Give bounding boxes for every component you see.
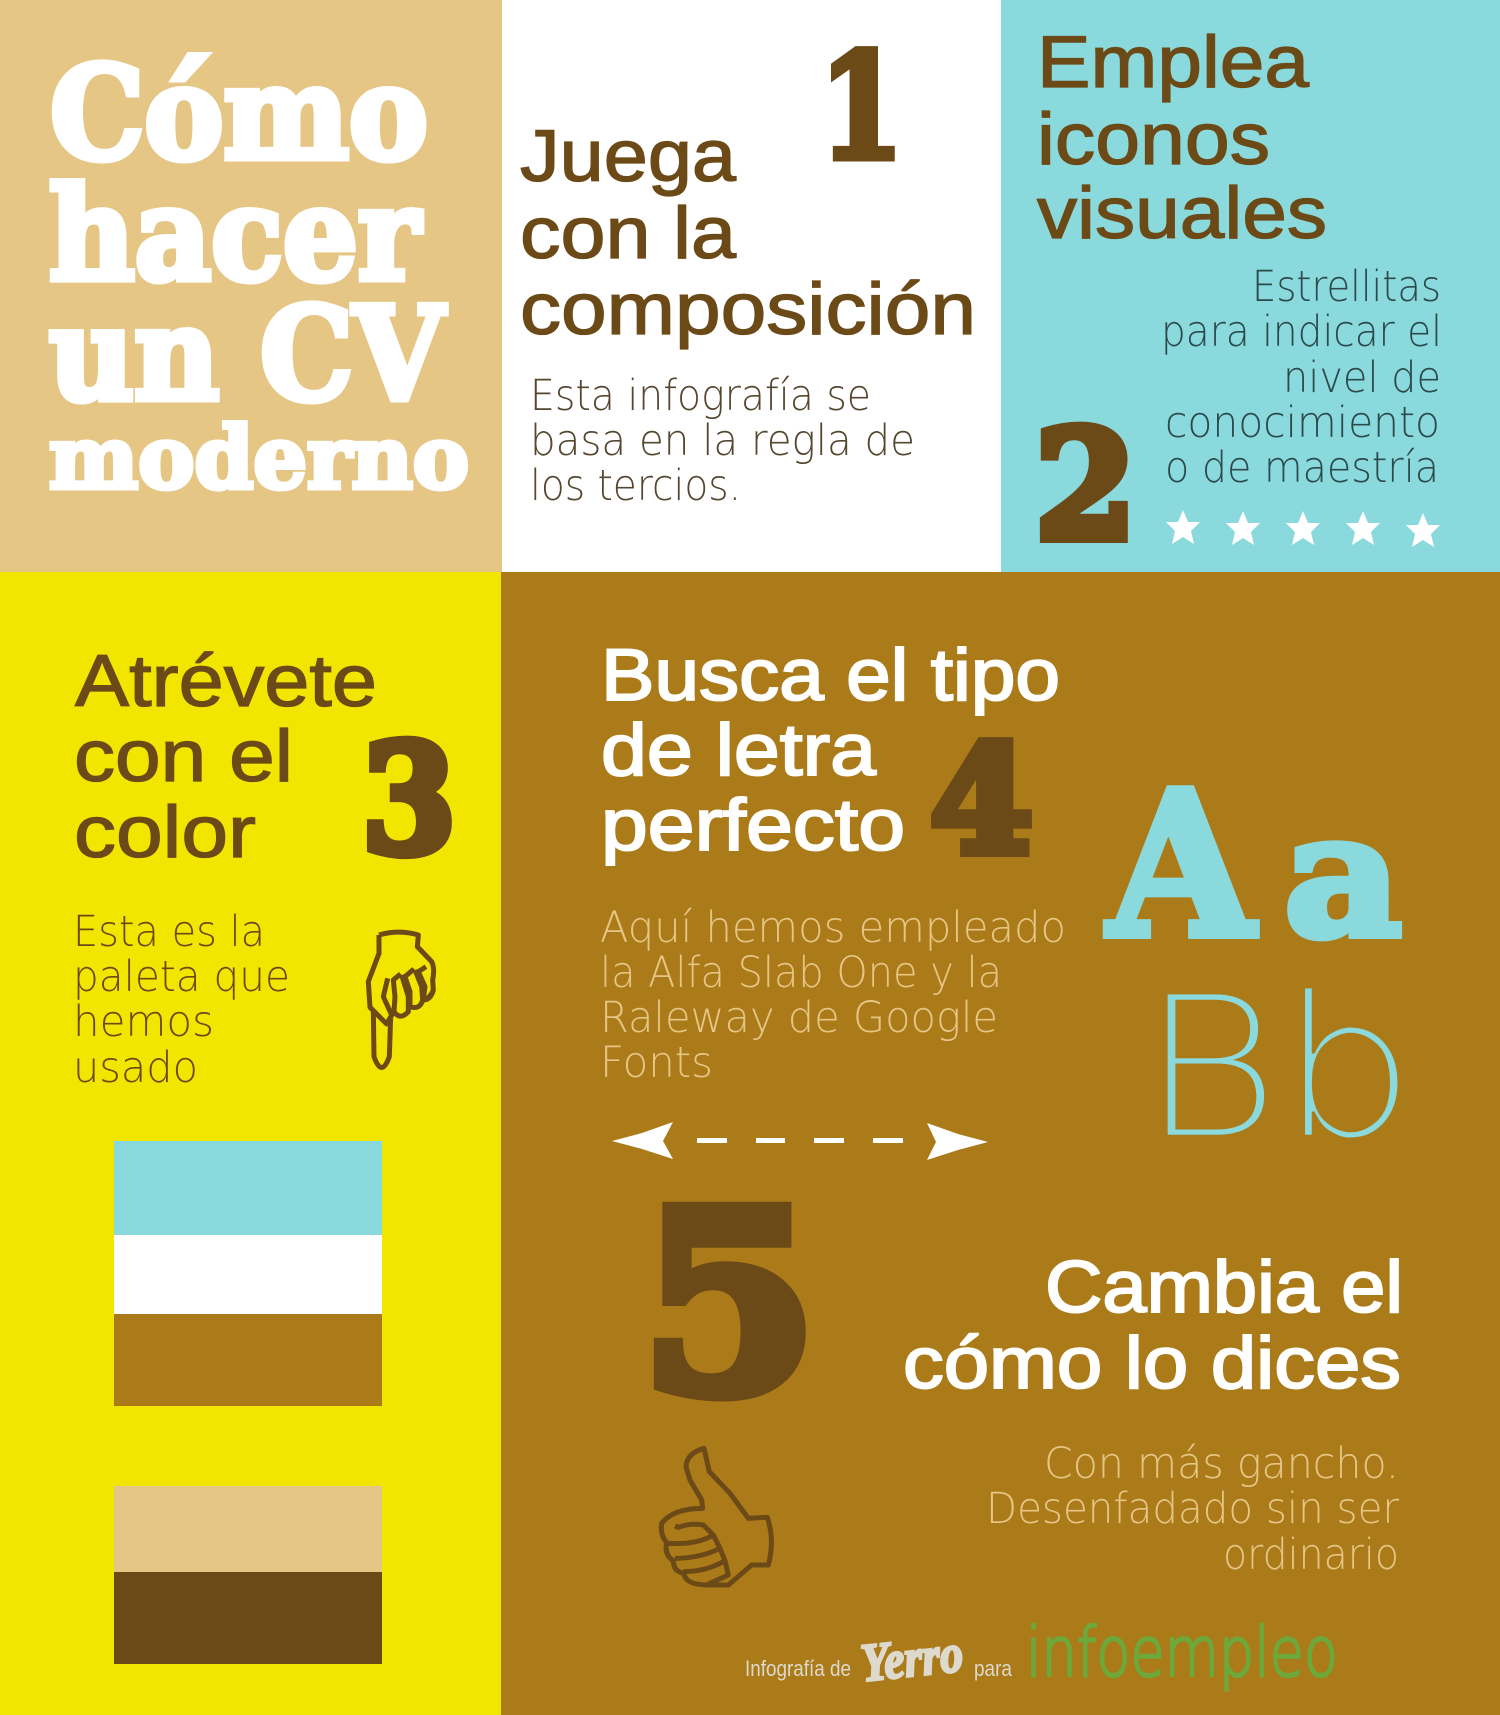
- heading: icons: iconos: [1037, 99, 1270, 180]
- icon: thumbs up: [661, 1448, 771, 1585]
- title: un CV: [49, 280, 446, 430]
- heading: composition: composición: [520, 269, 976, 350]
- heading: tone: Cambia el: [1045, 1247, 1403, 1328]
- title: [49, 39, 469, 509]
- icon: pointing hand: [368, 932, 434, 1067]
- heading: colour: Atrévete: [75, 641, 377, 722]
- type sample: Bb: B: [1140, 955, 1280, 1183]
- icon: five stars: [1166, 510, 1440, 547]
- panel: icons: [1001, 0, 1500, 574]
- type sample: Aa: a: [1284, 776, 1402, 976]
- text: typeface body: la Alfa Slab One y la: [600, 948, 1002, 998]
- text: icons body: nivel de: [1283, 353, 1441, 403]
- text: composition body: basa en la regla de: [530, 416, 915, 466]
- heading: composition: Juega: [520, 116, 736, 197]
- heading: icons: visuales: [1037, 173, 1327, 254]
- number 5: 5: [640, 1156, 818, 1450]
- text: tone body: [986, 1439, 1399, 1580]
- credit: Infografía de: Infografía de: [745, 1656, 851, 1681]
- heading: tone: [903, 1247, 1403, 1404]
- number 3: 3: [362, 712, 456, 888]
- panel: composition: [502, 0, 1001, 572]
- text: typeface body: [600, 903, 1066, 1088]
- text: tone body: Con más gancho.: [1044, 1439, 1399, 1489]
- heading: tone: cómo lo dices: [903, 1323, 1401, 1404]
- title: hacer: [49, 160, 421, 310]
- text: composition body: los tercios.: [530, 461, 741, 511]
- text: icons body: conocimiento: [1165, 398, 1440, 448]
- number 4: 4: [930, 713, 1033, 887]
- title: moderno: [49, 408, 469, 509]
- footer credits: [745, 1613, 1338, 1693]
- arrow: double-headed dashed: [612, 1122, 988, 1160]
- text: typeface body: Raleway de Google: [600, 993, 998, 1043]
- text: tone body: ordinario: [1223, 1530, 1399, 1580]
- number 2: 2: [1035, 398, 1136, 574]
- text: colour body: Esta es la: [73, 907, 265, 957]
- type sample: Aa: A: [1106, 748, 1257, 983]
- heading: typeface: de letra: [601, 710, 876, 791]
- heading: composition: [520, 116, 976, 350]
- heading: colour: color: [74, 792, 256, 873]
- text: colour body: paleta que: [73, 952, 290, 1002]
- heading: typeface: [601, 635, 1060, 866]
- colour palette: dark swatches: [114, 1486, 382, 1664]
- text: icons body: para indicar el: [1161, 307, 1442, 357]
- type sample: Aa: [1106, 748, 1402, 983]
- text: tone body: Desenfadado sin ser: [986, 1484, 1399, 1534]
- heading: icons: Emplea: [1037, 22, 1309, 103]
- text: icons body: Estrellitas: [1252, 262, 1441, 312]
- panel: typeface and tone: [501, 572, 1500, 1715]
- heading: composition: con la: [520, 193, 736, 274]
- type sample: Bb: [1140, 955, 1416, 1183]
- heading: colour: con el: [74, 716, 293, 797]
- colour palette: light swatches: [114, 1141, 382, 1406]
- heading: icons: [1037, 22, 1327, 254]
- text: typeface body: Fonts: [600, 1038, 713, 1088]
- text: icons body: [1161, 262, 1442, 493]
- number 1: 1: [819, 22, 904, 193]
- text: composition body: Esta infografía se: [530, 371, 871, 421]
- panel: title: [0, 0, 502, 572]
- type sample: Bb: b: [1279, 955, 1416, 1183]
- text: composition body: [530, 371, 915, 511]
- text: colour body: usado: [73, 1043, 198, 1093]
- heading: typeface: Busca el tipo: [601, 635, 1060, 716]
- text: icons body: o de maestría: [1165, 443, 1439, 493]
- logo: infoempleo: infoempleo: [1026, 1613, 1338, 1693]
- title: Cómo: [50, 39, 428, 189]
- text: colour body: [73, 907, 290, 1093]
- credit: para: para: [974, 1656, 1013, 1681]
- panel: colour: [0, 572, 501, 1715]
- heading: typeface: perfecto: [601, 785, 905, 866]
- text: colour body: hemos: [73, 997, 214, 1047]
- logo: Yerro: Yerro: [858, 1623, 966, 1693]
- text: typeface body: Aquí hemos empleado: [600, 903, 1066, 953]
- heading: colour: [74, 641, 377, 873]
